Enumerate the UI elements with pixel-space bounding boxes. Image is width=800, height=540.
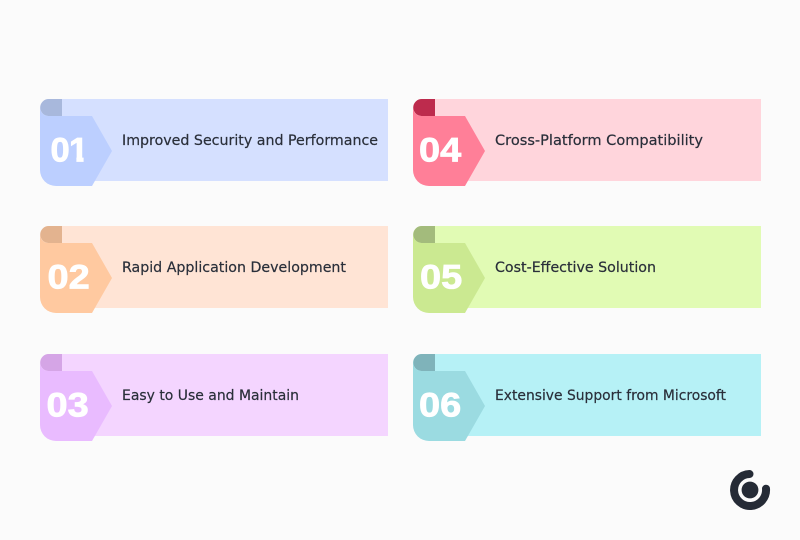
banner background — [40, 226, 388, 308]
panel: item 01 — [40, 99, 388, 186]
arrow badge — [413, 235, 485, 313]
icon: logo — [734, 474, 766, 506]
banner background — [40, 99, 388, 181]
number: 05 — [420, 257, 462, 296]
arrow badge — [413, 108, 485, 186]
number: 0 — [50, 132, 70, 170]
number: 02 — [48, 257, 90, 296]
banner background — [40, 354, 388, 436]
folded tab — [413, 354, 435, 371]
number: 06 — [419, 385, 461, 424]
number: 03 — [46, 385, 89, 424]
folded tab — [40, 99, 62, 116]
label: Cost-Effective Solution — [495, 260, 656, 276]
panel: item 04 — [413, 99, 761, 186]
banner background — [413, 354, 761, 436]
infographic canvas — [40, 99, 770, 510]
banner background — [413, 99, 761, 181]
panel: item 02 — [40, 226, 388, 313]
number — [52, 137, 84, 162]
label: Easy to Use and Maintain — [122, 388, 299, 404]
folded tab — [40, 226, 62, 243]
banner background — [413, 226, 761, 308]
arrow badge — [40, 108, 112, 186]
label: Improved Security and Performance — [122, 133, 378, 149]
arrow badge — [40, 235, 112, 313]
panel: item 06 — [413, 354, 761, 441]
panel: item 05 — [413, 226, 761, 313]
folded tab — [413, 99, 435, 116]
number: 1 — [69, 132, 88, 170]
folded tab — [413, 226, 435, 243]
panel: item 03 — [40, 354, 388, 441]
label: Cross-Platform Compatibility — [495, 133, 703, 149]
label: Rapid Application Development — [122, 260, 347, 276]
number: 04 — [419, 130, 461, 169]
folded tab — [40, 354, 62, 371]
arrow badge — [40, 363, 112, 441]
label: Extensive Support from Microsoft — [495, 388, 726, 404]
arrow badge — [413, 363, 485, 441]
